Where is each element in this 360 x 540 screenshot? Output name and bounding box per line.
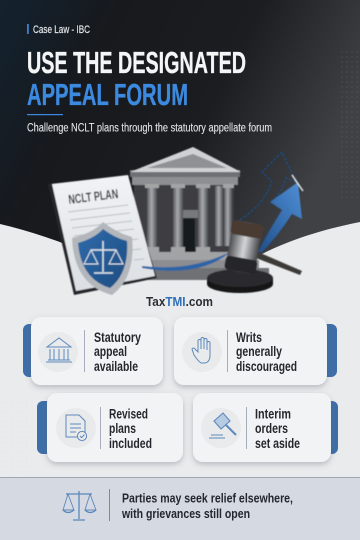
footer text: [121, 490, 293, 521]
eyebrow label: [27, 24, 90, 36]
icon: raised hand: [192, 338, 210, 363]
document: NCLT plan: [48, 175, 157, 295]
card text: appeal: [94, 344, 127, 359]
icon: scales: [63, 491, 96, 520]
card text: [94, 330, 141, 374]
footer text: with grievances still open: [121, 506, 250, 521]
title: APPEAL FORUM: [27, 77, 188, 112]
title: [27, 45, 246, 112]
brand: TaxTMI.com: TaxTMI.com: [146, 295, 213, 309]
subtitle: Challenge NCLT plans through the statutory appellate forum: [27, 122, 272, 134]
card text: generally: [236, 344, 282, 359]
hero illustration: [48, 147, 303, 295]
card: statutory appeal: [23, 317, 163, 385]
card text: plans: [109, 421, 136, 436]
card: writs discouraged: [174, 317, 337, 385]
card text: [236, 330, 297, 374]
eyebrow label: Case Law - IBC: [33, 24, 90, 36]
card text: set aside: [255, 436, 300, 451]
card: interim orders: [193, 393, 338, 462]
icon: gavel: [207, 220, 302, 293]
card text: included: [109, 436, 152, 451]
document: NCLT plan: NCLT PLAN: [68, 186, 119, 207]
card text: Interim: [255, 406, 291, 422]
card text: [255, 406, 300, 451]
card text: Writs: [236, 330, 262, 345]
icon: document check: [66, 415, 87, 441]
footer band: [0, 477, 360, 540]
card text: orders: [255, 421, 288, 436]
card text: Statutory: [94, 330, 141, 345]
icon: shield with scales: [72, 222, 133, 295]
card: revised plans: [37, 393, 183, 462]
card text: available: [94, 359, 138, 374]
swoosh: [142, 252, 230, 271]
icon: rising arrow: [236, 152, 303, 252]
icon: gavel small: [209, 413, 236, 438]
dark header background: [0, 0, 360, 262]
icon: bank: [46, 338, 72, 362]
icon: courthouse: [130, 147, 269, 280]
card text: discouraged: [236, 359, 297, 374]
card text: [109, 406, 152, 451]
card text: Revised: [109, 406, 148, 422]
footer text: Parties may seek relief elsewhere,: [122, 490, 293, 506]
